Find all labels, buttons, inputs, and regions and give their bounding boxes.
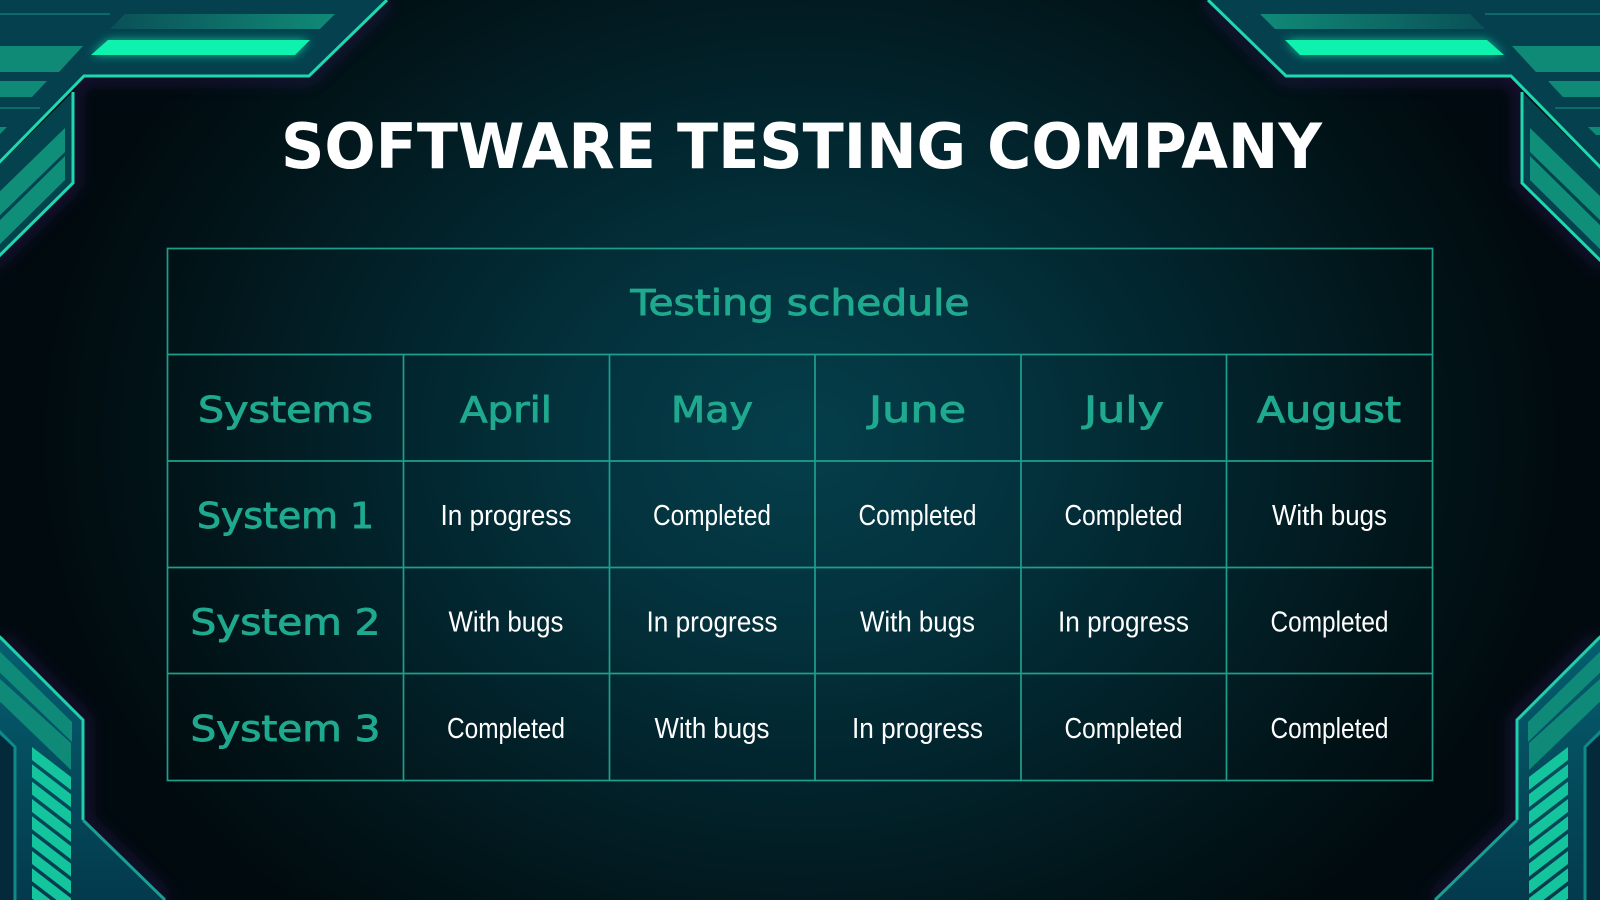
header row: July bbox=[1082, 390, 1164, 431]
row: system 3: With bugs bbox=[654, 713, 770, 745]
corner: top left bbox=[0, 0, 387, 265]
row: system 3: Completed bbox=[447, 713, 565, 745]
row: system 3: Completed bbox=[1064, 713, 1182, 745]
header row: April bbox=[460, 390, 552, 431]
row: system 3: Completed bbox=[1270, 713, 1388, 745]
table: testing schedule bbox=[167, 248, 1433, 781]
row: system 1: Completed bbox=[653, 500, 771, 532]
row: system 2: With bugs bbox=[448, 606, 564, 638]
row: system 2: Completed bbox=[1270, 606, 1388, 638]
corner: top right bbox=[1208, 0, 1600, 265]
row: system 1: With bugs bbox=[1272, 500, 1387, 532]
row: system 2: With bugs bbox=[860, 606, 975, 638]
row: system 3 bbox=[190, 709, 1388, 750]
row: system 1: Completed bbox=[1064, 500, 1182, 532]
row: system 2: System 2 bbox=[190, 602, 380, 644]
row: system 3: In progress bbox=[852, 713, 983, 745]
corner: bottom right bbox=[1435, 628, 1600, 900]
table heading: Testing schedule bbox=[629, 283, 970, 324]
row: system 1 bbox=[197, 496, 1387, 537]
row: system 2 bbox=[190, 602, 1388, 644]
row: system 3: System 3 bbox=[190, 709, 380, 750]
row: system 1: System 1 bbox=[197, 496, 374, 537]
row: system 1: Completed bbox=[858, 500, 976, 532]
table grid bbox=[167, 248, 1433, 781]
header row: May bbox=[671, 390, 753, 431]
corner: bottom left bbox=[0, 628, 165, 900]
row: system 2: In progress bbox=[646, 606, 778, 638]
header row: Systems bbox=[198, 390, 373, 431]
header row bbox=[198, 390, 1401, 431]
row: system 1: In progress bbox=[440, 500, 572, 532]
header row: June bbox=[867, 390, 966, 431]
row: system 2: In progress bbox=[1058, 606, 1189, 638]
title: SOFTWARE TESTING COMPANY bbox=[281, 110, 1323, 183]
header row: August bbox=[1257, 390, 1401, 431]
